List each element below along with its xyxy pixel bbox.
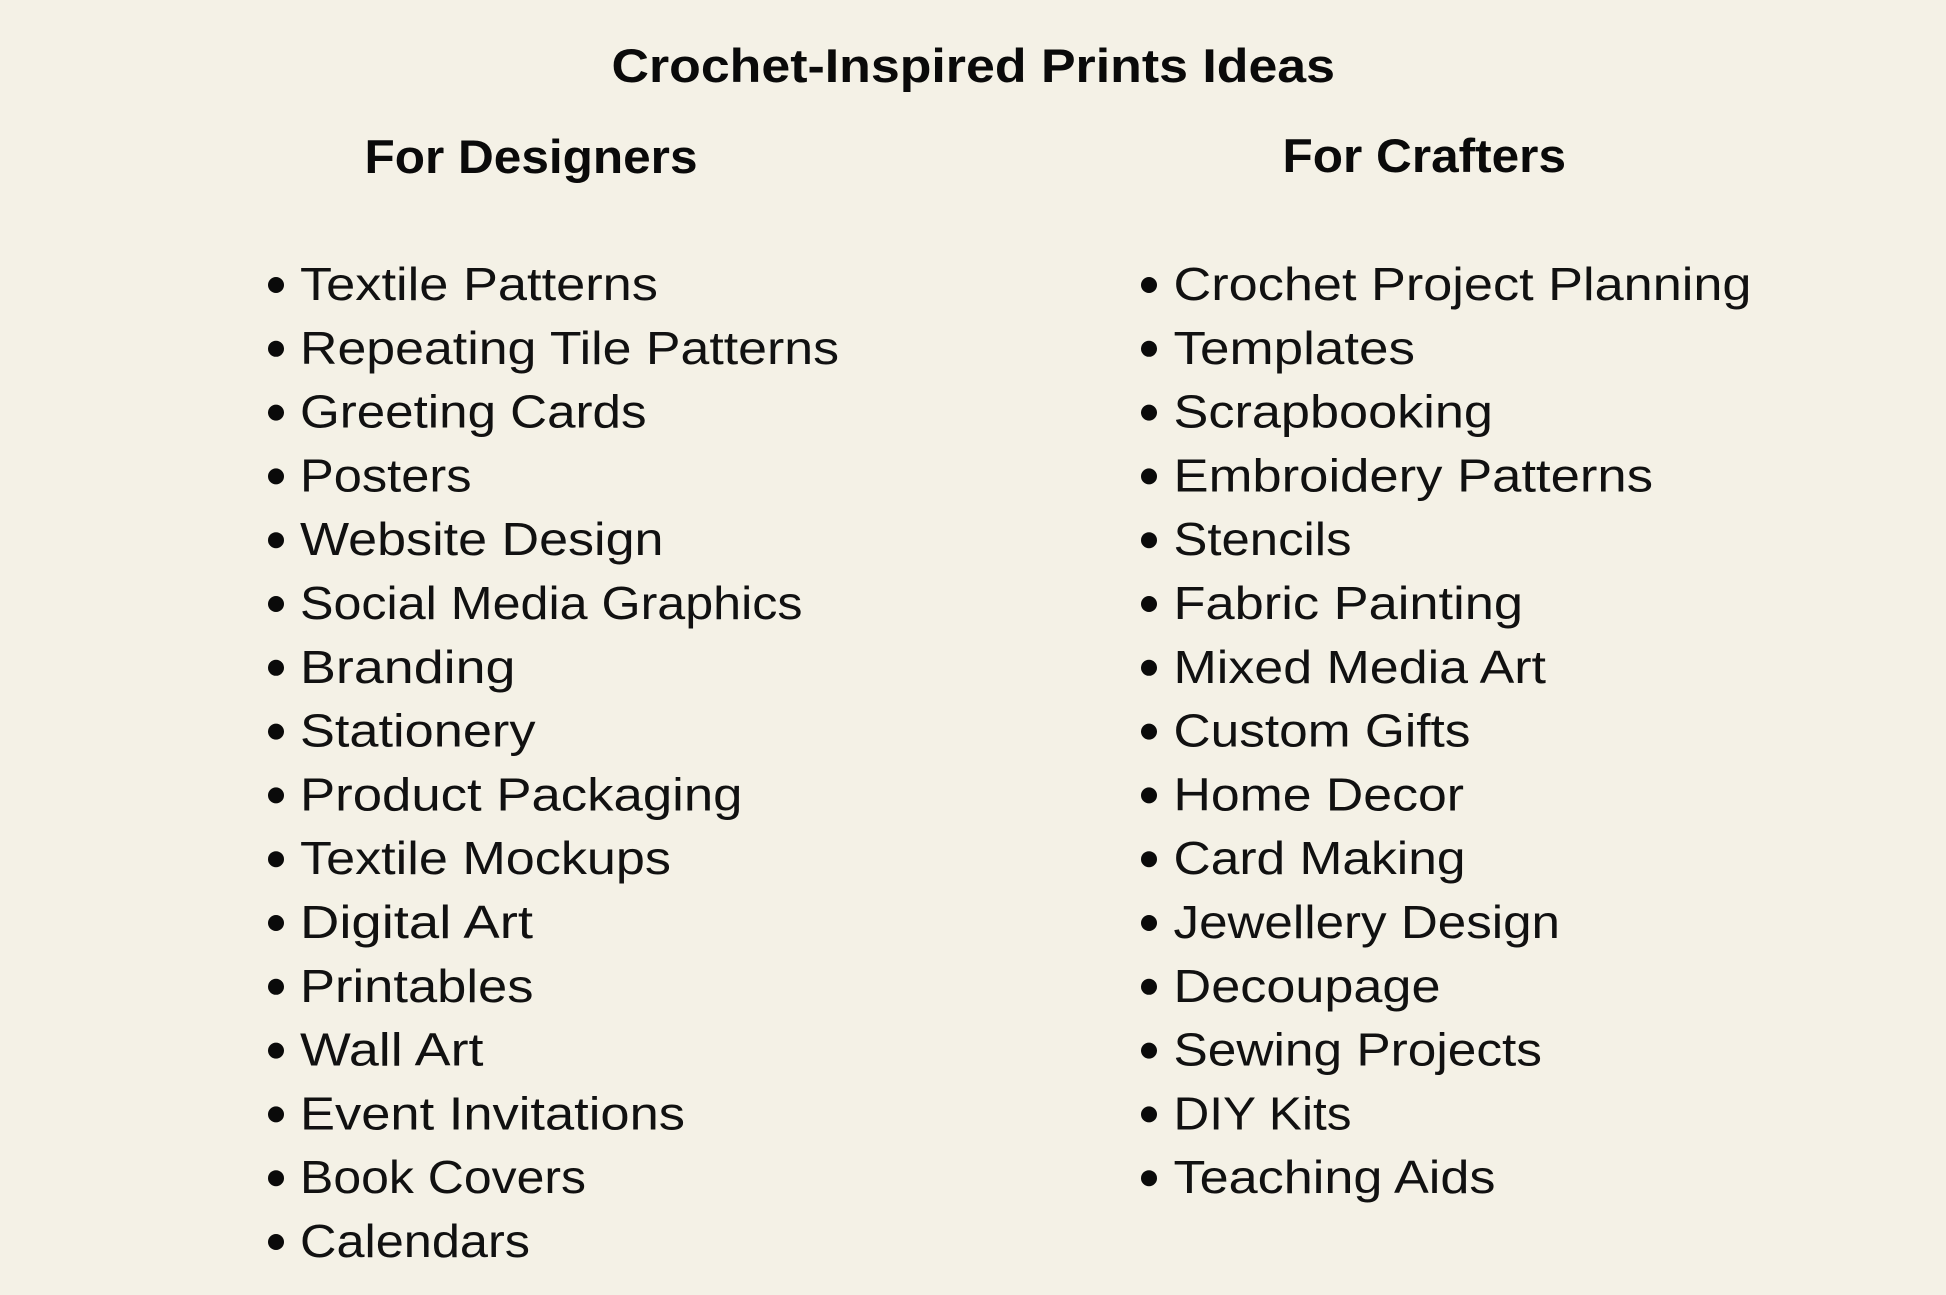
heading: for crafters: For Crafters [1282,129,1566,182]
list item: Embroidery Patterns [1174,449,1653,501]
list item: Social Media Graphics [300,577,802,629]
list item: Decoupage [1174,960,1440,1012]
panel: for designers [268,130,839,1267]
list item: Mixed Media Art [1174,641,1546,693]
list item: DIY Kits [1174,1087,1352,1139]
list item: Branding [300,641,516,693]
list item: Posters [300,449,472,501]
list item: Wall Art [300,1024,484,1076]
list item: Textile Patterns [300,258,658,310]
list item: Stencils [1174,513,1352,565]
list item: Jewellery Design [1174,896,1560,948]
heading: for designers: For Designers [364,130,698,183]
list item: Repeating Tile Patterns [300,322,839,374]
list item: Website Design [300,513,664,565]
list item: Teaching Aids [1174,1151,1496,1203]
list item: Greeting Cards [300,386,646,438]
list item: Product Packaging [300,768,742,820]
list item: Textile Mockups [300,832,671,884]
list item: Crochet Project Planning [1174,258,1752,310]
list item: Book Covers [300,1151,586,1203]
list item: Templates [1174,322,1415,374]
list item: Calendars [300,1215,530,1267]
list item: Scrapbooking [1174,386,1493,438]
panel: for crafters [1141,129,1752,1203]
list item: Digital Art [300,896,533,948]
list item: Home Decor [1174,768,1464,820]
list item: Event Invitations [300,1087,685,1139]
title: Crochet-Inspired Prints Ideas [612,39,1335,92]
list item: Fabric Painting [1174,577,1523,629]
list item: Card Making [1174,832,1466,884]
list item: Stationery [300,705,536,757]
list item: Sewing Projects [1174,1024,1542,1076]
list item: Printables [300,960,534,1012]
list item: Custom Gifts [1174,705,1470,757]
